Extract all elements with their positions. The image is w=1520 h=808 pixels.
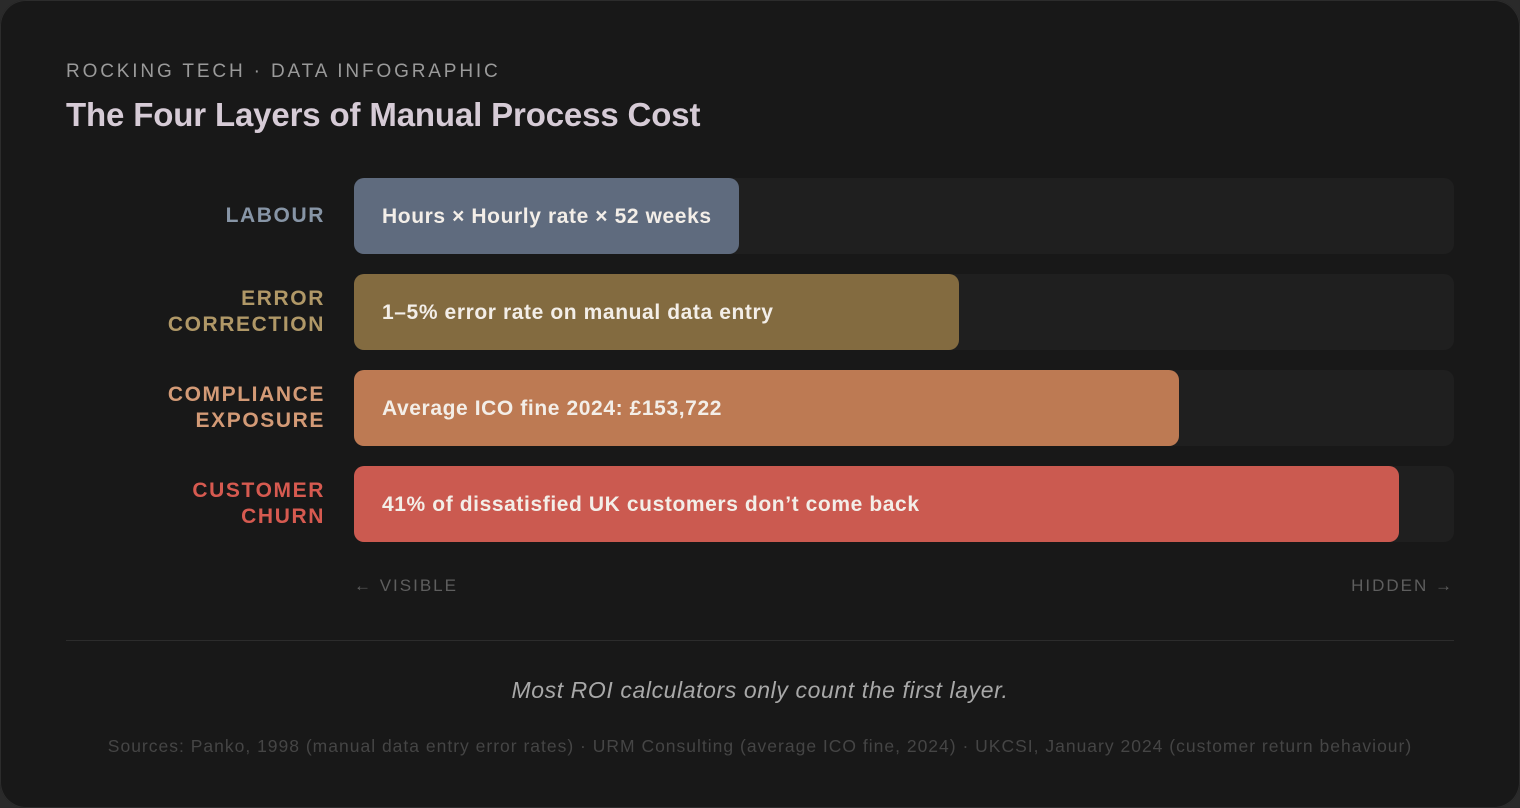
- eyebrow: ROCKING TECH · DATA INFOGRAPHIC: [66, 61, 501, 82]
- title: The Four Layers of Manual Process Cost: [66, 96, 700, 133]
- bar row: compliance: Average ICO fine 2024: £153,722: [382, 397, 722, 420]
- sources: Sources: Panko, 1998 (manual data entry error rates) · URM Consulting (average ICO fine, 2024) · UKCSI, January 2024 (customer return behaviour): [108, 736, 1412, 756]
- bar row: error: 1–5% error rate on manual data entry: [382, 301, 774, 324]
- label: compliance: EXPOSURE: [196, 409, 325, 432]
- label: churn: CUSTOMER: [192, 479, 325, 502]
- label: error correction: CORRECTION: [168, 313, 325, 336]
- label: error correction: [168, 287, 325, 336]
- label: labour: LABOUR: [226, 204, 325, 227]
- label: churn: CHURN: [241, 505, 325, 528]
- bar row: compliance: [354, 370, 1454, 446]
- label: error correction: ERROR: [241, 287, 325, 310]
- axis: hidden: HIDDEN →: [1351, 576, 1454, 595]
- label: compliance: COMPLIANCE: [168, 383, 325, 406]
- bar row: churn: [354, 466, 1454, 542]
- bar row: labour: Hours × Hourly rate × 52 weeks: [382, 205, 712, 228]
- bar row: labour: [354, 178, 1454, 254]
- bar row: churn: 41% of dissatisfied UK customers don’t come back: [382, 493, 920, 516]
- axis: visible: ← VISIBLE: [354, 576, 458, 595]
- bar row: error: [354, 274, 1454, 350]
- label: compliance: [168, 383, 325, 432]
- label: churn: [192, 479, 325, 528]
- takeaway: Most ROI calculators only count the first layer.: [511, 677, 1009, 703]
